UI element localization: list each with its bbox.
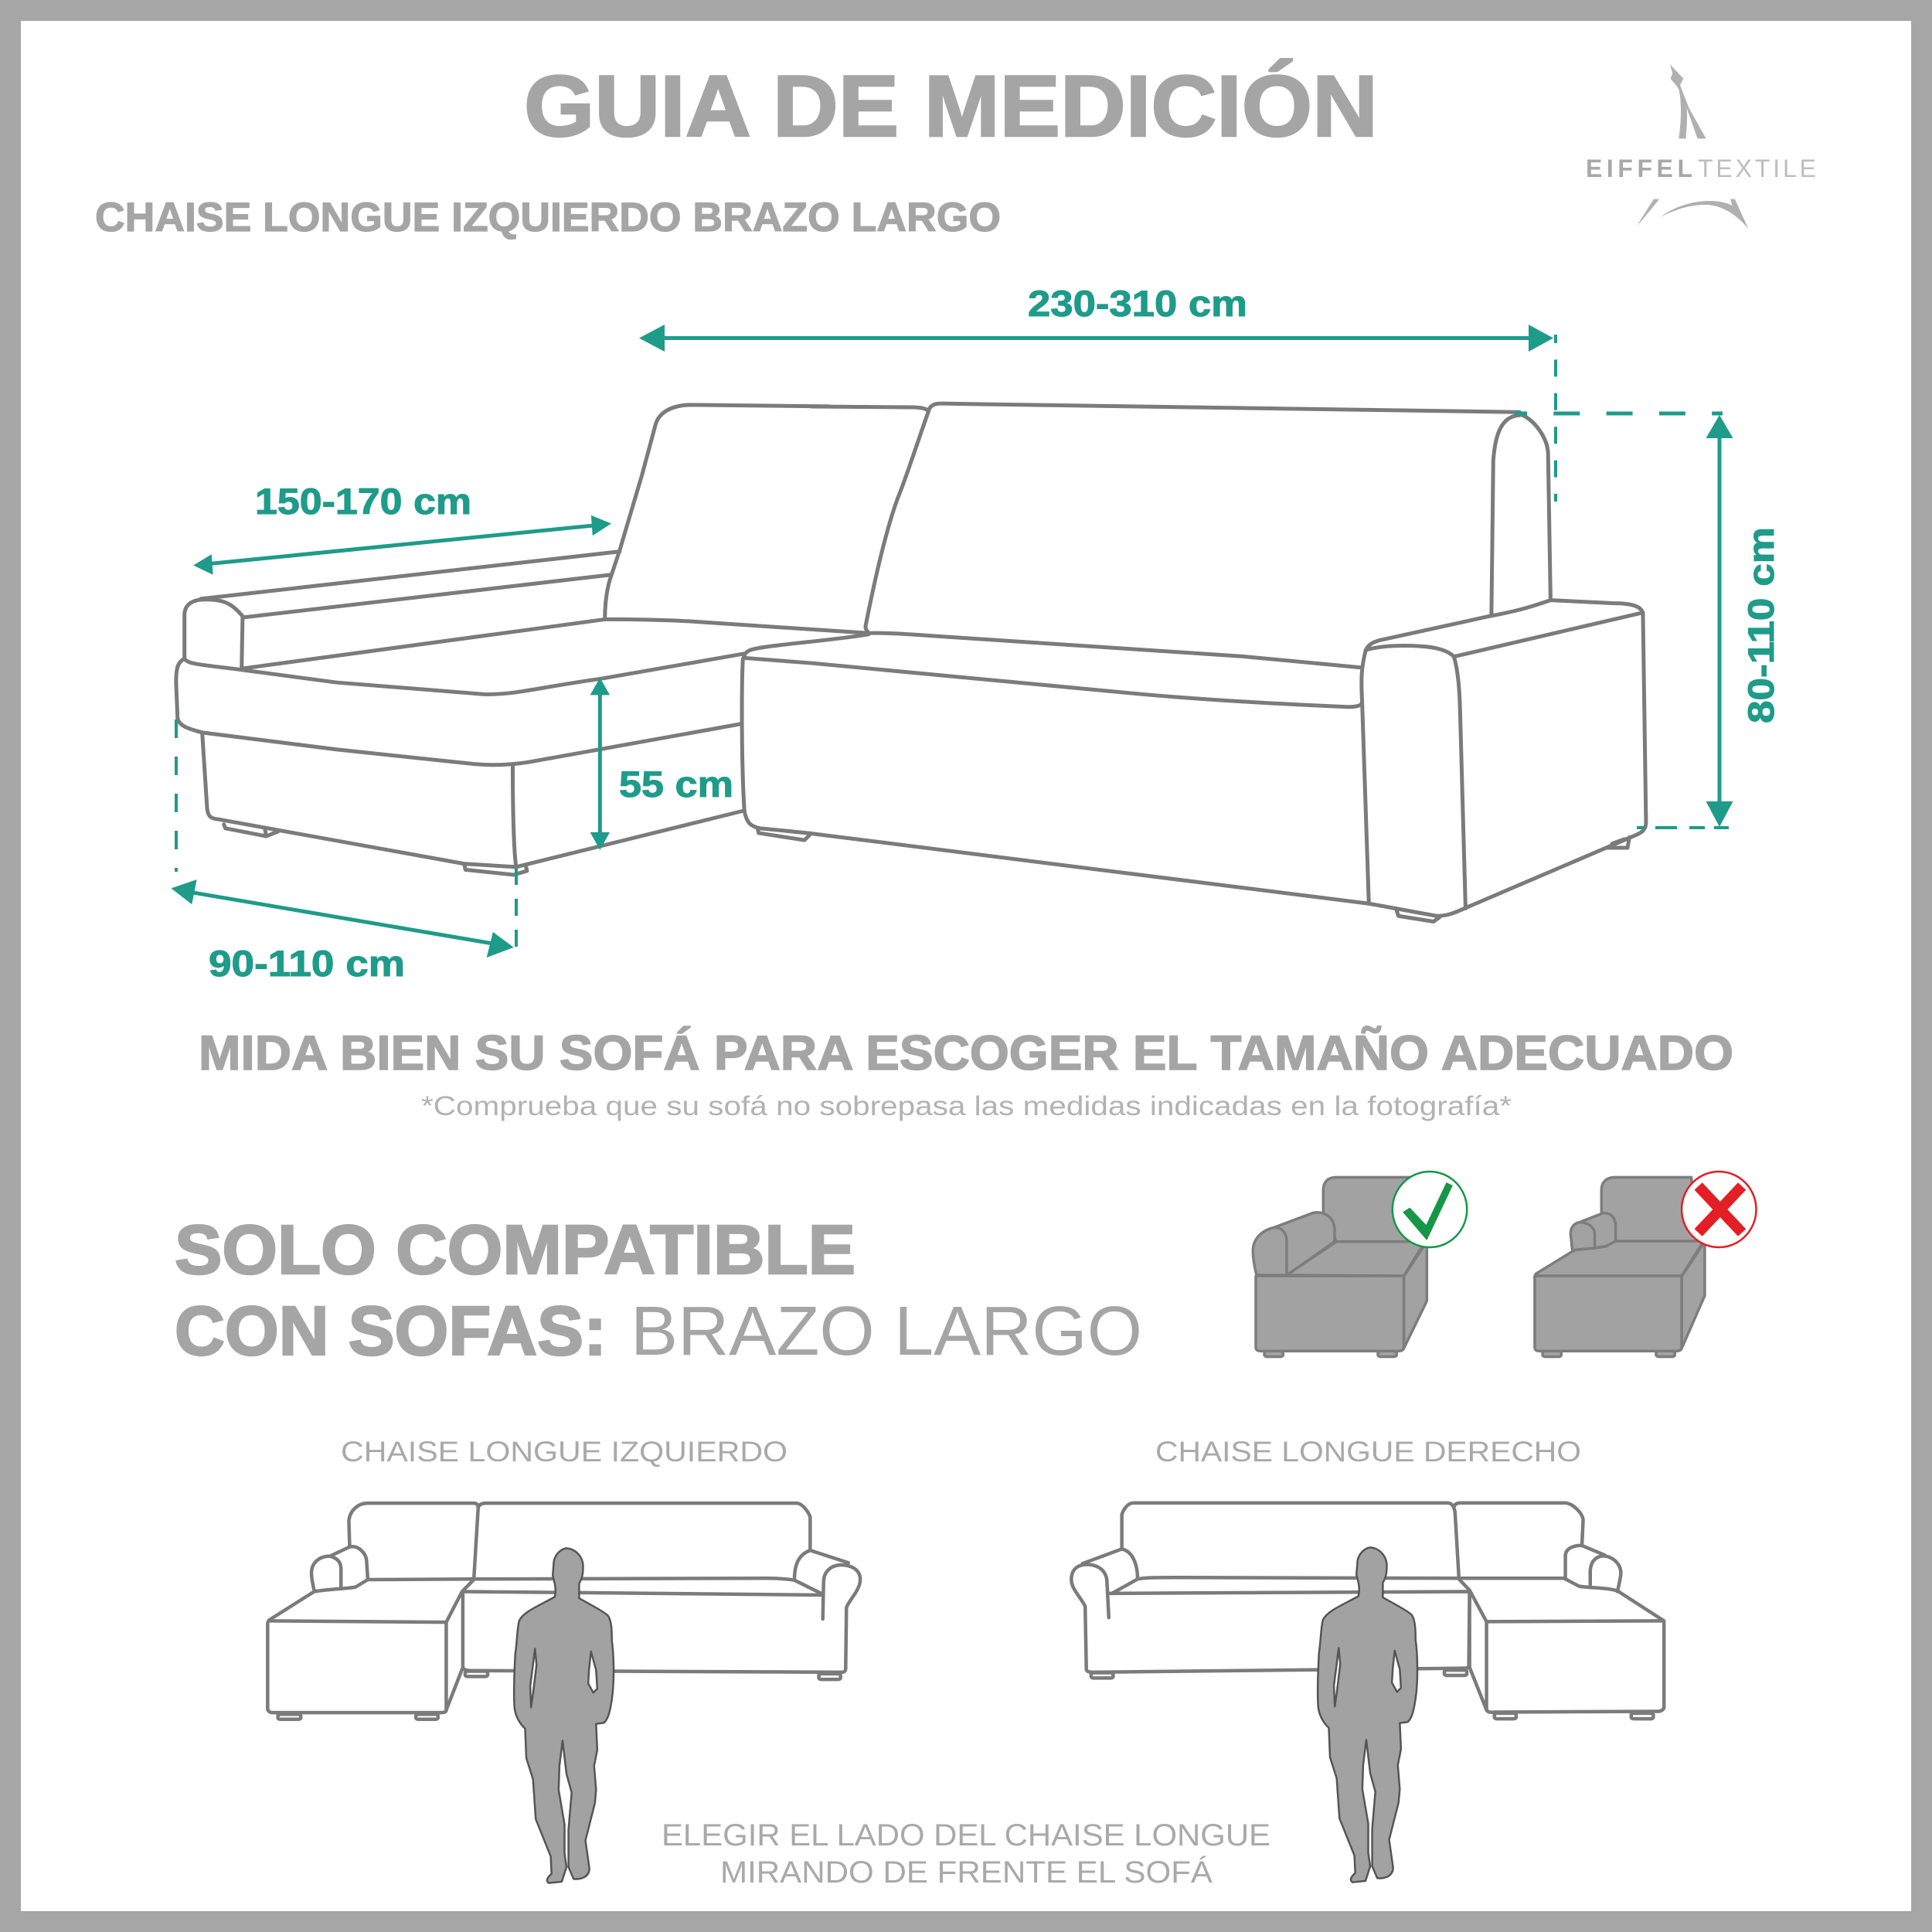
icon: compatible long arm sofa bbox=[1253, 1172, 1467, 1357]
sofa silhouette bbox=[1253, 1177, 1427, 1357]
label 90-110 cm: 90-110 cm bbox=[209, 943, 405, 984]
logo: Eiffel Textile bbox=[1586, 64, 1816, 229]
right chaise caption: CHAISE LONGUE DERECHO bbox=[1155, 1436, 1581, 1468]
person silhouette right bbox=[1318, 1547, 1417, 1883]
sofa silhouette bbox=[1535, 1177, 1705, 1357]
main sofa line drawing bbox=[176, 403, 1646, 922]
logo wordmark bold: EIFFEL bbox=[1586, 155, 1692, 182]
subtitle: CHAISE LONGUE IZQUIERDO BRAZO LARGO bbox=[95, 195, 1001, 240]
regular part: BRAZO LARGO bbox=[631, 1293, 1142, 1370]
logo wordmark light: TEXTILE bbox=[1698, 155, 1816, 182]
dashed guide lines bbox=[176, 335, 1729, 951]
main section outline bbox=[811, 403, 1646, 922]
cross badge bbox=[1682, 1172, 1756, 1247]
check badge bbox=[1393, 1172, 1467, 1247]
left chaise sofa outline bbox=[267, 1503, 860, 1719]
dimension: total width arrow 230-310 cm bbox=[639, 325, 1553, 352]
advice heading: MIDA BIEN SU SOFÁ PARA ESCOGER EL TAMAÑO ADECUADO bbox=[199, 1026, 1733, 1080]
advice note: *Comprueba que su sofá no sobrepasa las medidas indicadas en la fotografía* bbox=[421, 1091, 1512, 1121]
compatibility heading line 2 bbox=[175, 1293, 1142, 1370]
bold part: CON SOFAS: bbox=[175, 1293, 607, 1370]
logo tower mark bbox=[1637, 64, 1748, 229]
icon: incompatible short arm sofa bbox=[1535, 1172, 1756, 1357]
right chaise sofa outline bbox=[1071, 1503, 1664, 1719]
instruction line 2: MIRANDO DE FRENTE EL SOFÁ bbox=[720, 1855, 1213, 1889]
compatibility heading line 1: SOLO COMPATIBLE bbox=[175, 1212, 855, 1289]
instruction line 1: ELEGIR EL LADO DEL CHAISE LONGUE bbox=[662, 1818, 1270, 1852]
label 80-110 cm: 80-110 cm bbox=[1740, 527, 1781, 723]
dimension: seat height arrow 55 cm bbox=[590, 678, 610, 850]
label 230-310 cm: 230-310 cm bbox=[1028, 283, 1247, 324]
dimension: chaise width arrow 90-110 cm bbox=[171, 879, 514, 957]
label 150-170 cm: 150-170 cm bbox=[255, 481, 471, 522]
chaise section outline bbox=[176, 405, 869, 875]
dimension: total height arrow 80-110 cm bbox=[1706, 415, 1733, 827]
dimension: seat depth arrow 150-170 cm bbox=[193, 515, 611, 575]
label 55 cm: 55 cm bbox=[619, 764, 733, 804]
left chaise caption: CHAISE LONGUE IZQUIERDO bbox=[341, 1436, 787, 1468]
person silhouette left bbox=[514, 1548, 614, 1883]
title: GUIA DE MEDICIÓN bbox=[524, 58, 1378, 155]
